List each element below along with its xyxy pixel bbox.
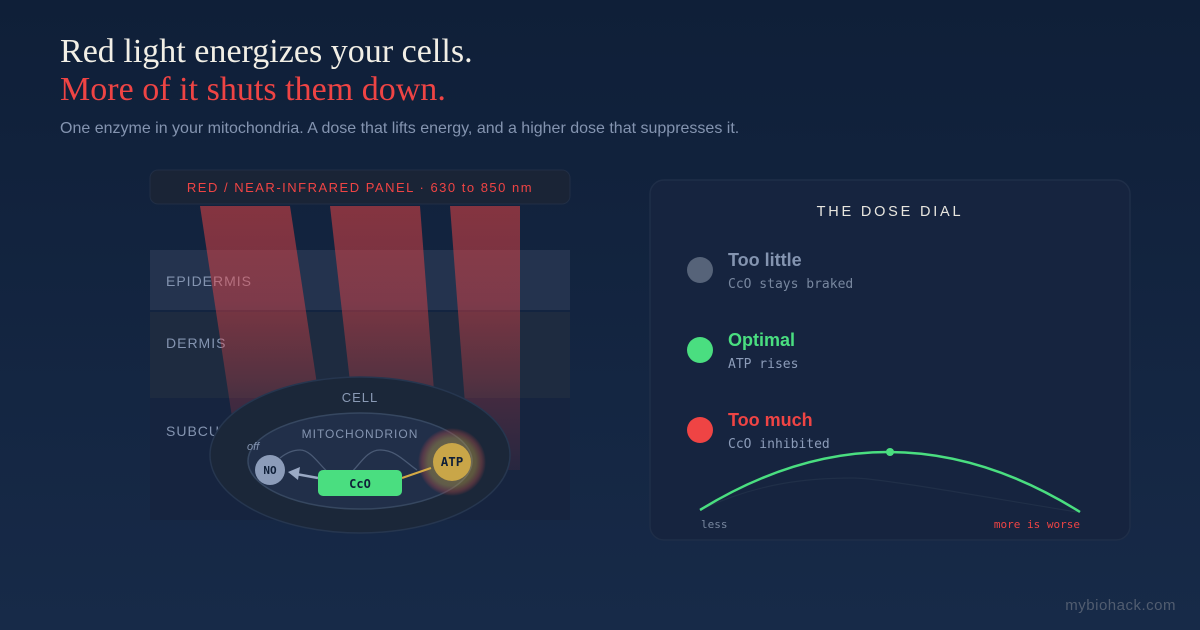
label: epidermis: EPIDERMIS — [166, 273, 252, 289]
ATP molecule: ATP — [441, 454, 463, 469]
item: too much: Too much — [728, 410, 813, 430]
item: optimal: Optimal — [728, 330, 795, 350]
NO molecule — [255, 455, 285, 485]
item: too little: CcO stays braked — [728, 277, 853, 292]
panel: skin layers — [150, 250, 570, 520]
axis label: less: less — [701, 518, 728, 531]
ATP molecule — [433, 443, 471, 481]
watermark: mybiohack.com — [1065, 597, 1176, 614]
title: Red light energizes your cells. — [60, 33, 473, 70]
item: too little: Too little — [728, 250, 802, 270]
title — [60, 33, 473, 108]
dose response curve — [700, 448, 1080, 512]
heading: THE DOSE DIAL — [817, 204, 963, 220]
link: CcO to ATP — [402, 468, 431, 478]
cristae fold — [280, 450, 417, 478]
subtitle: One enzyme in your mitochondria. A dose that lifts energy, and a higher dose that suppresses it. — [60, 120, 739, 137]
panel: light source: RED / NEAR-INFRARED PANEL · 630 to 850 nm — [187, 180, 533, 195]
arrow: NO released — [288, 467, 318, 480]
CcO enzyme: CcO — [349, 477, 371, 491]
NO molecule: NO — [263, 464, 277, 477]
mitochondrion — [248, 413, 472, 509]
skin diagram — [150, 170, 570, 533]
label: dermis: DERMIS — [166, 335, 226, 351]
CcO enzyme — [318, 470, 402, 496]
item: optimal — [687, 330, 798, 372]
label: mitochondrion: MITOCHONDRION — [302, 427, 418, 441]
label: cell: CELL — [342, 390, 378, 405]
title: More of it shuts them down. — [60, 71, 446, 108]
item: too much — [687, 410, 830, 452]
panel: dose dial — [650, 180, 1130, 540]
item: optimal: ATP rises — [728, 357, 798, 372]
item: too little — [687, 250, 853, 292]
light beams — [200, 206, 520, 470]
cell — [210, 377, 510, 533]
item: too much: CcO inhibited — [728, 437, 830, 452]
label: subcutis: SUBCUTIS — [166, 423, 245, 439]
axis label: more is worse: more is worse — [994, 518, 1080, 531]
ATP glow — [418, 428, 486, 496]
panel: light source — [150, 170, 570, 204]
label: off: off — [247, 441, 260, 453]
